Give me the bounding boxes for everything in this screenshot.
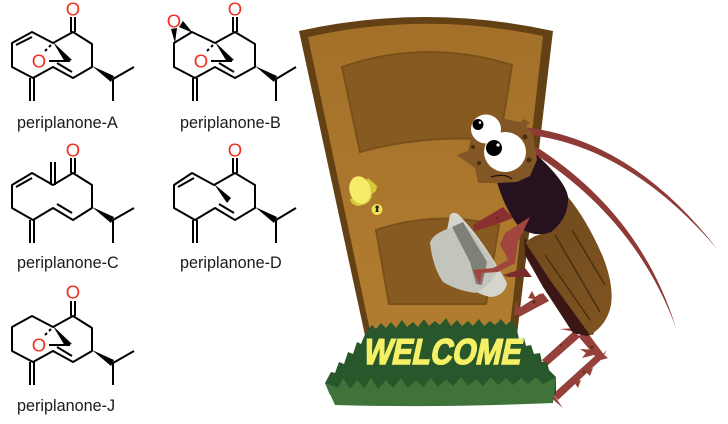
wing bbox=[525, 197, 612, 335]
label: periplanone-B: periplanone-B bbox=[180, 114, 281, 132]
back leg upper bbox=[514, 291, 549, 317]
illustration: door bbox=[299, 17, 553, 340]
hat brim bbox=[445, 213, 507, 297]
lower arm bbox=[473, 217, 530, 285]
lower door panel bbox=[376, 219, 499, 304]
antenna front bbox=[533, 146, 676, 328]
keyhole bbox=[372, 204, 382, 215]
molecule: periplanone-J: O bbox=[32, 334, 46, 356]
hat bbox=[430, 213, 507, 297]
mat top bbox=[325, 318, 556, 395]
door frame bbox=[299, 17, 553, 340]
antenna back bbox=[522, 127, 718, 250]
label: periplanone-J: periplanone-J bbox=[17, 397, 115, 415]
door leaf bbox=[308, 24, 543, 340]
illustration: cockroach bbox=[430, 114, 718, 408]
hat band bbox=[452, 222, 487, 285]
hat crown bbox=[430, 226, 498, 293]
molecule: periplanone-B: O bbox=[194, 50, 208, 72]
label: periplanone-C: periplanone-C bbox=[17, 254, 119, 272]
mouth bbox=[491, 175, 512, 179]
dark underside of abdomen bbox=[524, 238, 594, 336]
molecule: periplanone-A: O bbox=[32, 50, 46, 72]
molecule: periplanone-J: O bbox=[66, 282, 80, 302]
molecule: periplanone-B bbox=[167, 0, 296, 101]
illustration: welcome mat bbox=[325, 318, 556, 406]
thorax bbox=[497, 155, 568, 234]
back leg middle bbox=[542, 328, 580, 366]
molecule: periplanone-J bbox=[12, 282, 134, 385]
small eye bbox=[471, 114, 501, 144]
molecule: periplanone-D bbox=[174, 140, 296, 243]
label: periplanone-A: periplanone-A bbox=[17, 114, 118, 132]
molecule: periplanone-C bbox=[12, 140, 134, 243]
mat front bbox=[325, 377, 556, 406]
molecule: periplanone-B: O bbox=[167, 10, 181, 32]
back leg lower with claw bbox=[550, 332, 608, 408]
upper arm bbox=[473, 207, 513, 231]
wing veins bbox=[545, 230, 605, 320]
molecule: periplanone-A bbox=[12, 0, 134, 101]
large eye bbox=[484, 132, 526, 172]
upper door panel bbox=[342, 52, 512, 152]
molecule: periplanone-D: O bbox=[228, 140, 242, 160]
lower limb segment bbox=[503, 268, 532, 277]
molecule: periplanone-C: O bbox=[66, 140, 80, 160]
head bbox=[457, 114, 537, 183]
door knob bbox=[346, 174, 377, 206]
label: periplanone-D: periplanone-D bbox=[180, 254, 282, 272]
welcome lettering: WELCOME bbox=[360, 331, 527, 372]
